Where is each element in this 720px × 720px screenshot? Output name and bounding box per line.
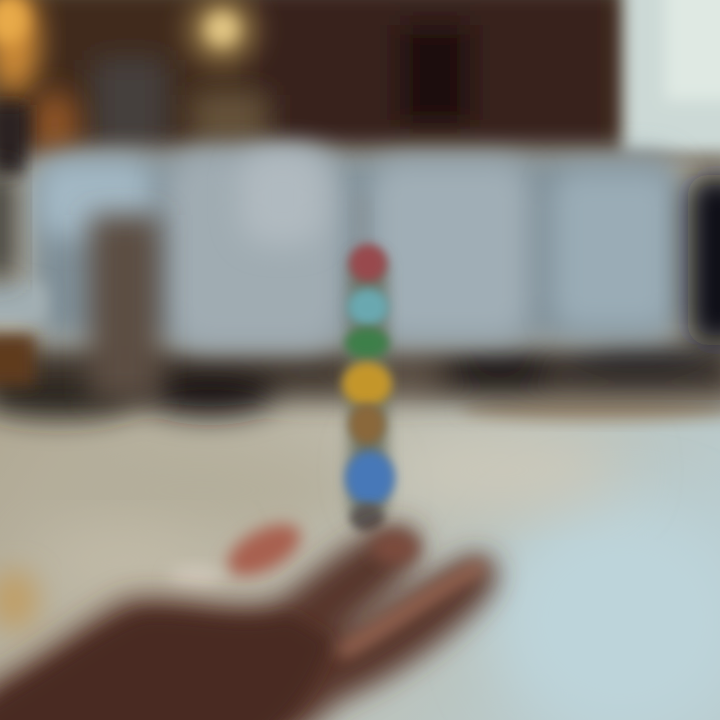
bead: red xyxy=(349,244,387,282)
back wall: dark brown xyxy=(0,0,720,155)
bead column shadow xyxy=(350,255,386,520)
palm core xyxy=(0,614,330,720)
palm xyxy=(0,525,496,720)
ceiling light xyxy=(188,0,256,64)
bead: brown orange xyxy=(349,404,385,444)
stem above beads xyxy=(354,195,368,250)
lamp: warm glow top left xyxy=(0,0,79,175)
dark lower band under sofa xyxy=(0,340,720,418)
bead: blue xyxy=(345,451,395,505)
bead: base xyxy=(350,504,384,532)
hand xyxy=(0,514,496,720)
bead: green xyxy=(345,328,389,358)
finger highlight xyxy=(345,568,478,650)
window: bright right side xyxy=(622,0,720,155)
dark object at right edge xyxy=(688,175,720,345)
bead stack xyxy=(342,195,395,532)
fingertip glow xyxy=(371,532,419,564)
pale highlight xyxy=(169,567,221,589)
floor xyxy=(0,396,720,720)
blurred finger: pink back xyxy=(219,514,309,586)
bead: light blue xyxy=(347,288,389,326)
sofa cushions: pale blue grey xyxy=(30,150,680,350)
brown chair at left xyxy=(0,170,160,400)
bead: yellow xyxy=(342,362,392,406)
